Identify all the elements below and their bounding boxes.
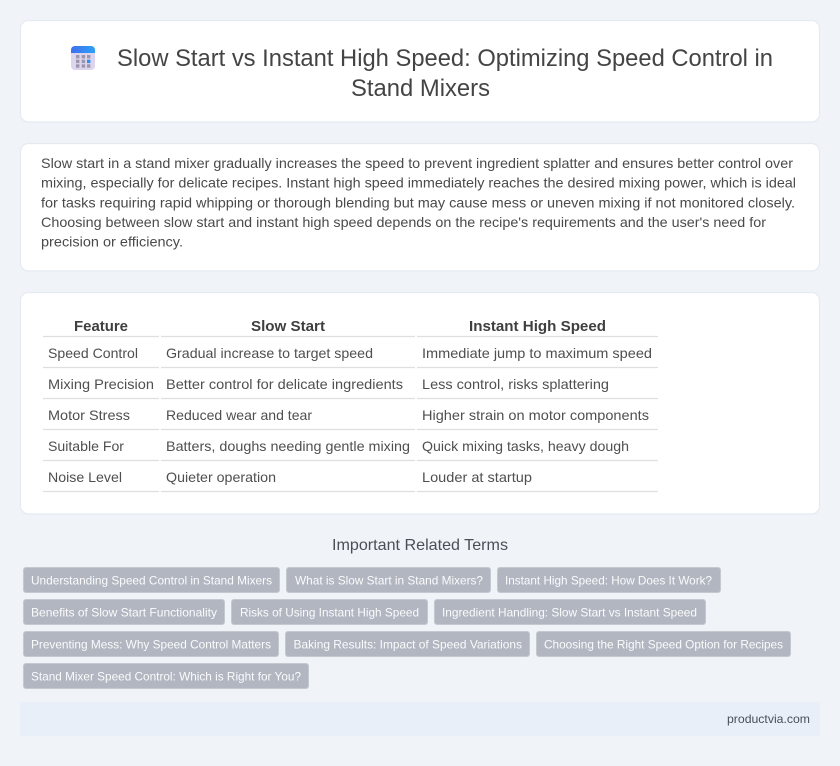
panel: header: [20, 20, 820, 122]
footer source text: productvia.com: [727, 712, 810, 726]
title: [117, 45, 773, 102]
tag: Risks of Using Instant High Speed: [240, 606, 419, 620]
summary text block: for tasks requiring rapid whipping or thorough blending but may cause mess or uneven mixing if not monitored closely.: [41, 194, 795, 210]
tag: Instant High Speed: How Does It Work?: [505, 574, 712, 588]
table row: suitable for: Quick mixing tasks, heavy dough: [422, 438, 629, 454]
table row: motor stress: Higher strain on motor components: [422, 407, 649, 423]
title: Stand Mixers: [351, 75, 490, 102]
table row: noise level: Quieter operation: [166, 469, 276, 485]
related terms tags: [24, 568, 790, 688]
tag: [24, 600, 224, 624]
tag: [24, 568, 280, 592]
table row: motor stress: Reduced wear and tear: [166, 407, 312, 423]
tag: Choosing the Right Speed Option for Recipes: [544, 638, 783, 652]
table row: noise level: Noise Level: [48, 469, 122, 485]
table row: mixing precision: Mixing Precision: [48, 376, 154, 392]
table row: noise level: Louder at startup: [422, 469, 532, 485]
tag: [498, 568, 720, 592]
table row: speed control: Gradual increase to target speed: [166, 345, 373, 361]
tag: [536, 632, 790, 656]
table row: suitable for: Batters, doughs needing gentle mixing: [166, 438, 410, 454]
table row: motor stress: Motor Stress: [48, 407, 130, 423]
tag: [286, 568, 490, 592]
footer: [20, 702, 820, 736]
summary text block: Choosing between slow start and instant high speed depends on the recipe's requirements and the user's need for: [41, 214, 766, 230]
summary text block: mixing, especially for delicate recipes. Instant high speed immediately reaches the desired mixing power, which is ideal: [41, 174, 796, 190]
tag: [24, 632, 278, 656]
table header row: Instant High Speed: [469, 318, 606, 335]
table row: speed control: Speed Control: [48, 345, 138, 361]
table header row: Feature: [74, 318, 128, 335]
tag: [232, 600, 428, 624]
table row: suitable for: [43, 438, 658, 460]
table row: motor stress: [43, 407, 658, 430]
table row: mixing precision: Less control, risks splattering: [422, 376, 609, 392]
tag: Benefits of Slow Start Functionality: [31, 606, 217, 620]
table row: speed control: Immediate jump to maximum speed: [422, 345, 652, 361]
table row: noise level: [43, 469, 658, 492]
summary text block: precision or efficiency.: [41, 234, 183, 250]
tag: What is Slow Start in Stand Mixers?: [295, 574, 483, 588]
tag: Preventing Mess: Why Speed Control Matters: [31, 638, 271, 652]
table row: mixing precision: [43, 376, 658, 398]
panel: summary: [20, 144, 820, 271]
tag: Understanding Speed Control in Stand Mixers: [31, 574, 272, 588]
title: Slow Start vs Instant High Speed: Optimizing Speed Control in: [117, 45, 773, 72]
heading: related terms: Important Related Terms: [332, 537, 508, 554]
table row: speed control: [43, 345, 658, 368]
tag: [434, 600, 706, 624]
summary text block: [41, 155, 796, 250]
summary text block: Slow start in a stand mixer gradually increases the speed to prevent ingredient splatter and ensures better control over: [41, 155, 793, 171]
tag: Stand Mixer Speed Control: Which is Right for You?: [31, 670, 301, 684]
table header row: [43, 318, 658, 336]
panel: comparison table: [20, 292, 820, 514]
tag: Ingredient Handling: Slow Start vs Instant Speed: [442, 606, 697, 620]
table header row: Slow Start: [251, 318, 325, 335]
icon: calendar: [71, 46, 95, 70]
table row: suitable for: Suitable For: [48, 438, 124, 454]
table row: mixing precision: Better control for delicate ingredients: [166, 376, 403, 392]
tag: [24, 664, 308, 688]
tag: Baking Results: Impact of Speed Variations: [294, 638, 522, 652]
tag: [286, 632, 530, 656]
